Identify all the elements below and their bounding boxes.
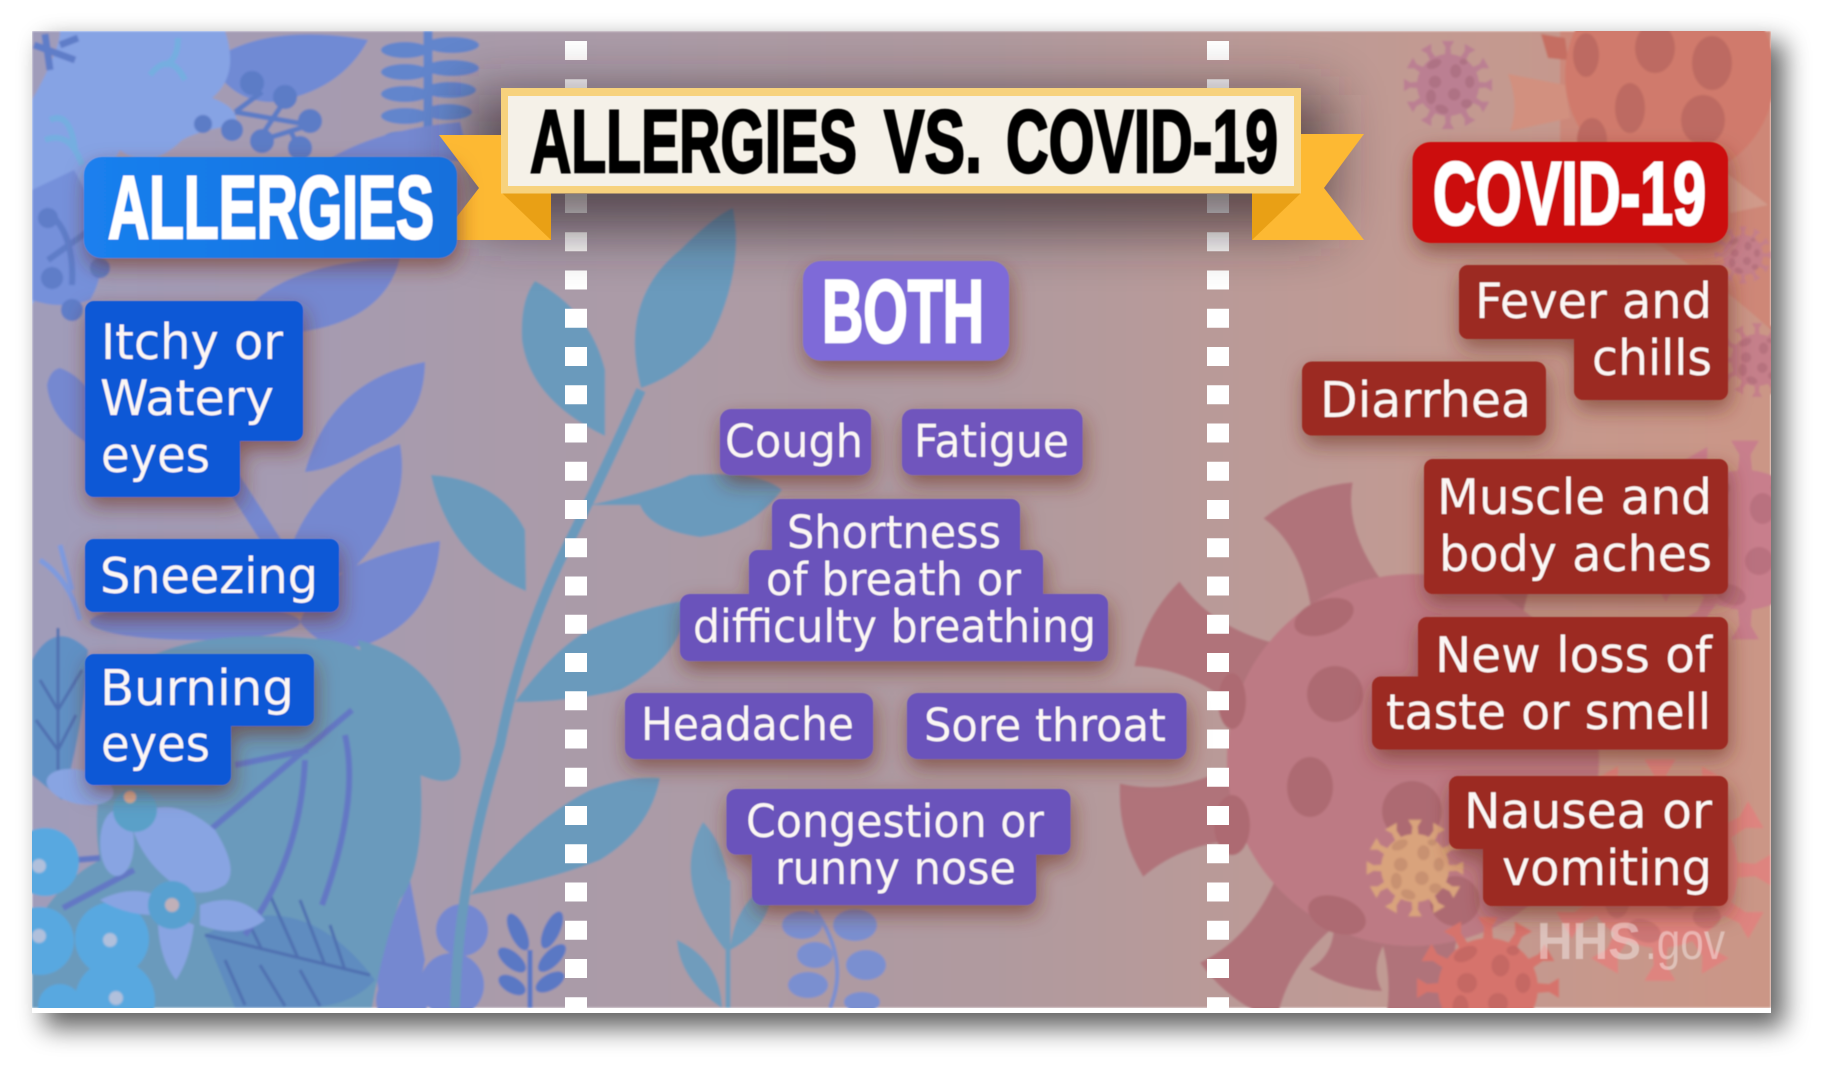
symptom: nausea or vomiting: vomiting [1502, 840, 1712, 897]
panel: both [625, 261, 1186, 905]
dashed divider: right [1207, 41, 1229, 1008]
source logo: hhs.gov: .gov [1645, 913, 1725, 971]
symptom: diarrhea [1302, 362, 1546, 436]
symptom: sneezing: Sneezing [100, 548, 318, 605]
symptom: congestion or runny nose: Congestion or [746, 795, 1044, 848]
symptom: fever and chills: chills [1592, 330, 1712, 387]
heading: covid-19 [1412, 142, 1728, 243]
title banner shadow [470, 95, 1330, 230]
ribbon: right [1252, 134, 1364, 240]
banner plate [501, 88, 1301, 194]
plant: small teal sprig [677, 822, 775, 1008]
symptom: burning eyes [85, 654, 314, 785]
heading: allergies: ALLERGIES [108, 157, 434, 257]
symptom: muscle and body aches: Muscle and [1437, 469, 1712, 526]
heading: allergies [84, 157, 457, 258]
symptom: sneezing [85, 539, 339, 612]
heading: covid-19: COVID-19 [1433, 143, 1706, 243]
heading: both [803, 261, 1009, 361]
ribbon: left [439, 135, 551, 240]
symptom: itchy or watery eyes: eyes [101, 427, 210, 484]
symptom: nausea or vomiting [1449, 776, 1728, 906]
source logo: hhs.gov [1537, 913, 1725, 971]
symptom: shortness of breath: of breath or [766, 553, 1021, 606]
symptom: new loss of taste or smell: New loss of [1435, 627, 1714, 684]
symptom: itchy or watery eyes: Itchy or [101, 314, 284, 371]
foliage: lined leaves [32, 628, 375, 1008]
symptom: shortness of breath: difficulty breathing [693, 600, 1096, 653]
title text: ALLERGIES [530, 91, 857, 191]
plant: central teal stem and leaves [431, 208, 782, 1008]
symptom: muscle and body aches: body aches [1439, 526, 1712, 583]
symptom: headache: Headache [641, 698, 854, 751]
virus: yellow [1367, 820, 1463, 916]
symptom: burning eyes: eyes [101, 716, 210, 773]
title text [530, 91, 1278, 191]
title text: COVID-19 [1006, 91, 1278, 191]
symptom: itchy or watery eyes: Watery [100, 370, 274, 427]
plant: dark periwinkle sprig [497, 910, 567, 1008]
symptom: congestion or runny nose [726, 789, 1070, 905]
virus: large central red [1113, 475, 1599, 1059]
dashed divider: left [565, 41, 587, 1008]
flowers: blue cluster and periwinkle blossoms [32, 768, 266, 1008]
symptom: shortness of breath [680, 499, 1108, 661]
top right tinted corner [1560, 31, 1771, 330]
virus: right edge medium [1728, 323, 1771, 397]
symptom: itchy or watery eyes [85, 301, 303, 497]
symptom: diarrhea: Diarrhea [1320, 372, 1531, 429]
symptom: sore throat: Sore throat [924, 699, 1166, 752]
virus: small purple top [1404, 41, 1492, 129]
panel: covid-19 [1302, 142, 1728, 971]
symptom: shortness of breath: Shortness [787, 506, 1001, 559]
foliage: teal mass [32, 636, 461, 1008]
symptom: nausea or vomiting: Nausea or [1464, 783, 1713, 840]
title banner [439, 88, 1364, 240]
symptom: muscle and body aches [1424, 459, 1728, 594]
symptom: burning eyes: Burning [100, 660, 294, 717]
heading: both: BOTH [822, 261, 984, 361]
symptom: fever and chills [1459, 265, 1728, 400]
plant: small periwinkle sprig [782, 909, 886, 1012]
symptom: new loss of taste or smell: taste or smell [1386, 684, 1711, 741]
foliage: top left [32, 31, 479, 321]
symptom: fever and chills: Fever and [1475, 273, 1712, 330]
virus: right edge small [1715, 227, 1771, 283]
source logo: hhs.gov: HHS [1537, 913, 1641, 971]
virus: top right large [1509, 31, 1771, 212]
symptom: congestion or runny nose: runny nose [775, 842, 1016, 895]
title text: VS. [884, 91, 982, 191]
small background sprig [40, 545, 80, 620]
symptom: new loss of taste or smell [1372, 617, 1728, 750]
foliage: branch lines [63, 710, 352, 935]
virus: pale pink lower right [1549, 759, 1771, 981]
panel: allergies [84, 157, 457, 785]
symptom: cough: Cough [725, 415, 863, 468]
symptom: fatigue: Fatigue [914, 415, 1069, 468]
foliage: periwinkle leaves [47, 258, 488, 1026]
virus: bottom coral [1416, 916, 1560, 1008]
virus: right edge pink [1662, 440, 1771, 640]
